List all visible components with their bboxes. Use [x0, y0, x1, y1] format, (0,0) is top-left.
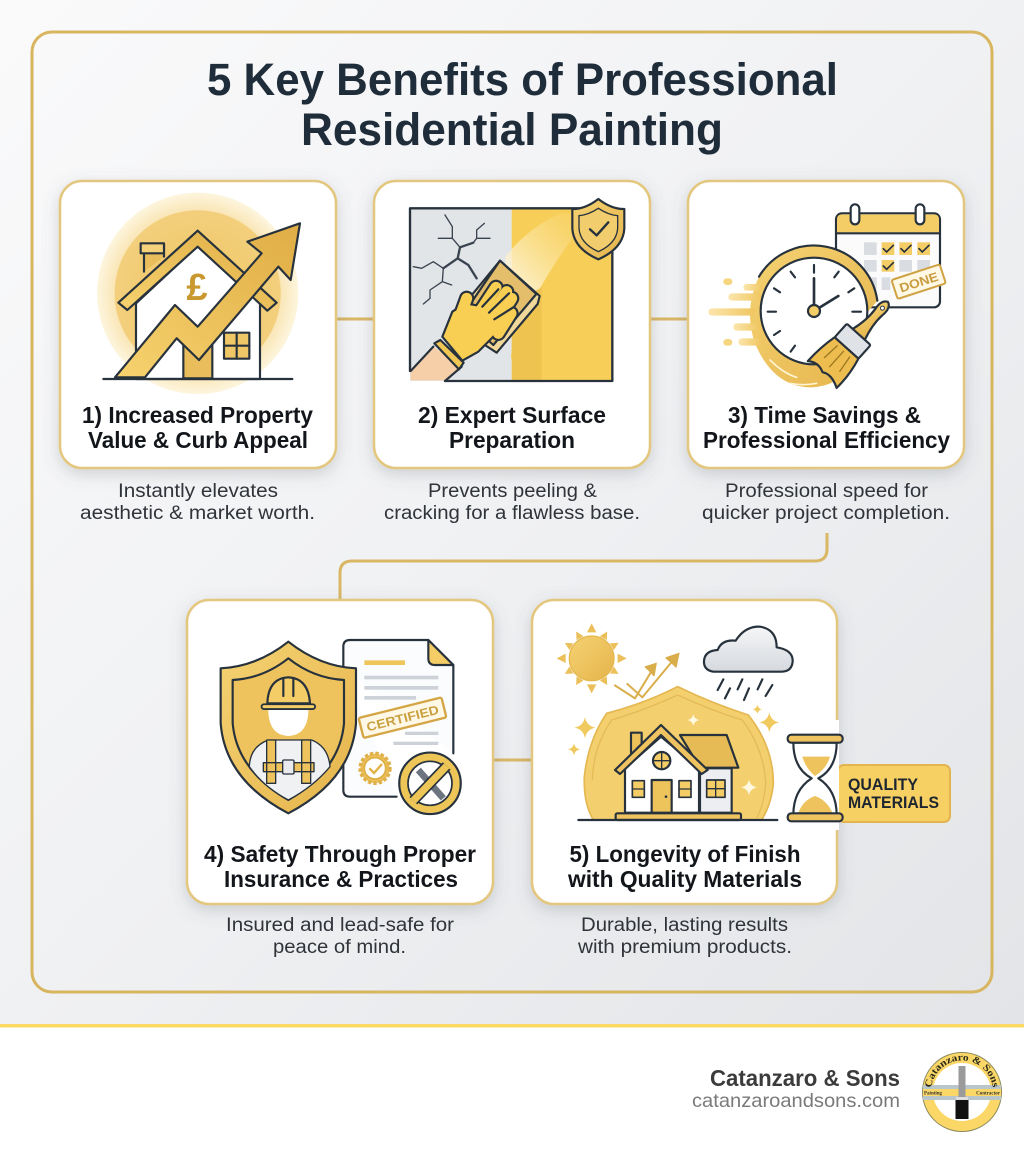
panel: card 1 property value — [60, 181, 336, 468]
panel: card 5 longevity — [532, 600, 950, 904]
card 3 description — [702, 481, 950, 524]
stamp: certified: CERTIFIED — [365, 703, 440, 734]
footer brand text — [692, 1065, 900, 1112]
icon: hourglass — [788, 735, 843, 821]
card 5 description: Durable, lasting results — [581, 915, 788, 936]
title: Residential Painting — [301, 104, 723, 155]
icon: house — [578, 725, 777, 820]
card 2 heading: 2) Expert Surface — [418, 402, 606, 428]
card 1 description: aesthetic & market worth. — [80, 503, 315, 524]
card 1 description — [80, 481, 315, 524]
title — [207, 54, 838, 155]
icon: clock calendar and brush — [708, 204, 946, 388]
card 3 description: Professional speed for — [725, 481, 929, 502]
panel: card 3 time savings — [688, 181, 964, 468]
icon: calendar — [836, 204, 940, 307]
outer frame — [32, 32, 992, 992]
card 1 heading: Value & Curb Appeal — [88, 427, 308, 453]
icon: no hazard sign — [399, 753, 461, 814]
card 2 heading — [418, 402, 606, 453]
footer brand text: catanzaroandsons.com — [692, 1090, 900, 1112]
card 4 description — [226, 915, 455, 958]
card 4 heading: 4) Safety Through Proper — [204, 841, 476, 867]
card 1 description: Instantly elevates — [118, 481, 278, 502]
card 4 description: Insured and lead-safe for — [226, 915, 455, 936]
badge: quality materials: QUALITY — [848, 776, 918, 794]
card 3 heading — [703, 402, 950, 453]
icon: worker shield and certificate — [221, 640, 461, 814]
seal — [360, 754, 390, 783]
icon: protected house, weather and hourglass — [557, 623, 843, 821]
card 2 description — [384, 481, 640, 524]
icon: paint swoosh — [708, 245, 877, 387]
badge: quality materials — [838, 765, 950, 822]
icon: clock face — [761, 258, 867, 364]
logo: Painting — [924, 1092, 943, 1096]
icon: house with rising arrow — [97, 193, 300, 394]
footer brand text: Catanzaro & Sons — [710, 1065, 900, 1091]
icon: shield check — [572, 199, 624, 259]
icon: pound sign: £ — [186, 267, 208, 309]
card 4 heading: Insurance & Practices — [224, 866, 458, 892]
card 5 heading: with Quality Materials — [567, 866, 802, 892]
card 2 description: Prevents peeling & — [428, 481, 597, 502]
icons: sparkles — [568, 705, 779, 795]
card 4 heading — [204, 841, 476, 892]
icon: paint brush — [807, 289, 903, 388]
panel: card 4 safety — [187, 600, 493, 904]
logo: Catanzaro & Sons — [925, 1056, 998, 1088]
icon: shield with worker — [221, 642, 356, 813]
card 2 heading: Preparation — [449, 427, 575, 453]
card 3 description: quicker project completion. — [702, 503, 950, 524]
icon: sun — [557, 623, 627, 693]
icon: glove sanding cracked wall — [410, 199, 624, 381]
badge: quality materials: MATERIALS — [848, 794, 939, 812]
icon: certificate document — [343, 640, 461, 814]
connectors between cards — [336, 319, 827, 760]
card 1 heading — [82, 402, 313, 453]
card 5 description — [577, 915, 792, 958]
card 3 heading: Professional Efficiency — [703, 427, 950, 453]
panel: card 2 surface preparation — [374, 181, 650, 468]
card 5 description: with premium products. — [577, 937, 792, 958]
title: 5 Key Benefits of Professional — [207, 54, 838, 105]
stamp: done — [891, 264, 946, 299]
footer band — [0, 1024, 1024, 1154]
card 4 description: peace of mind. — [273, 937, 406, 958]
logo — [922, 1052, 1002, 1132]
card 1 heading: 1) Increased Property — [82, 402, 313, 428]
stamp: certified — [359, 697, 446, 738]
card 2 description: cracking for a flawless base. — [384, 503, 640, 524]
glove — [434, 287, 514, 369]
icon: golden shield dome — [584, 687, 773, 820]
logo: Contractor — [976, 1092, 1001, 1096]
icon: rain cloud — [704, 627, 793, 700]
icon: upward arrows — [614, 654, 678, 698]
card 5 heading — [567, 841, 802, 892]
stamp: done: DONE — [898, 270, 940, 295]
card 5 heading: 5) Longevity of Finish — [570, 841, 800, 867]
card 3 heading: 3) Time Savings & — [728, 402, 921, 428]
